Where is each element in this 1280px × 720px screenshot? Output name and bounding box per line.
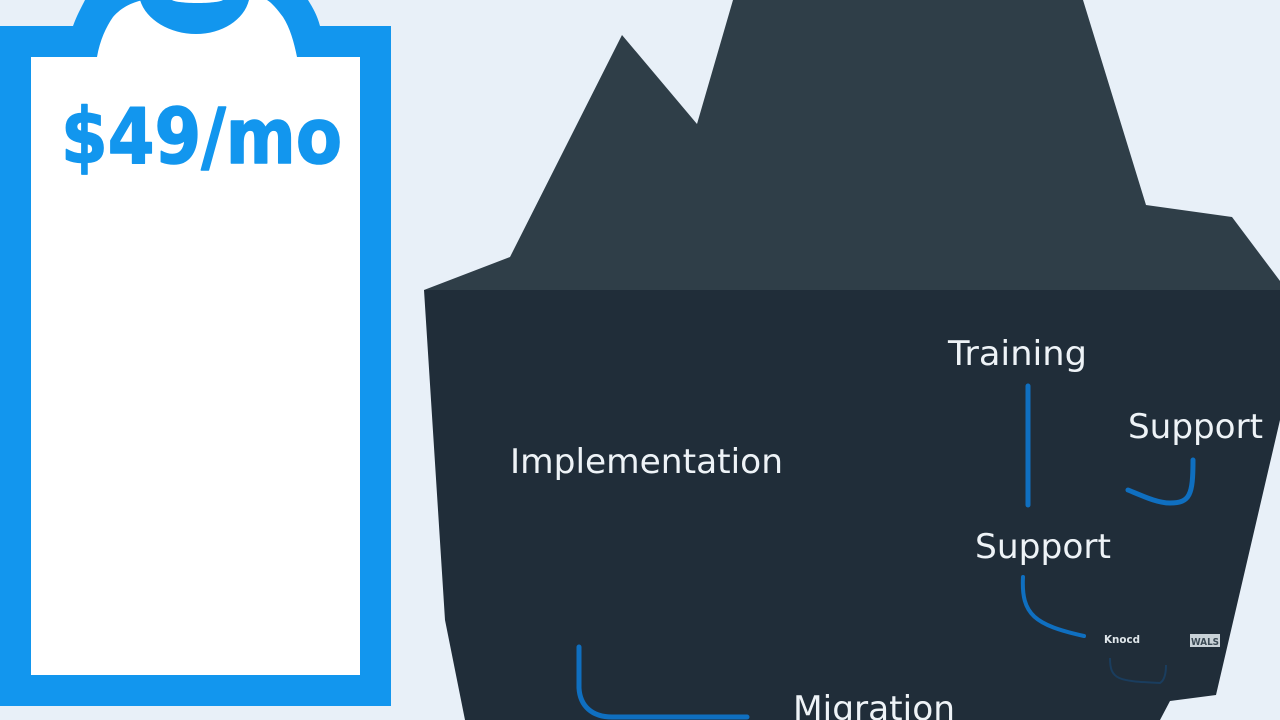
iceberg above water <box>424 0 1280 291</box>
label: Training: Training <box>947 334 1087 374</box>
panel: price tag <box>0 0 391 706</box>
label: Support centre: Support <box>975 527 1111 567</box>
tag frame <box>0 0 391 706</box>
iceberg below water <box>424 290 1280 720</box>
arrow: faint connector <box>1110 658 1166 683</box>
label: Implementation: Implementation <box>510 442 783 482</box>
price text: $49/mo <box>61 93 342 182</box>
small label: Knocd: Knocd <box>1104 633 1140 646</box>
small label box: WALS <box>1191 637 1219 648</box>
arrow: Support centre connector <box>1023 577 1084 636</box>
arrow: Support right connector <box>1128 460 1193 503</box>
arrow: Training connector <box>1026 386 1030 505</box>
arrow: Migration connector <box>579 647 747 717</box>
panel: iceberg <box>424 0 1280 720</box>
icon: tag hole ring <box>140 0 249 34</box>
label: Support right: Support <box>1128 407 1263 447</box>
tag inner card <box>31 0 360 675</box>
